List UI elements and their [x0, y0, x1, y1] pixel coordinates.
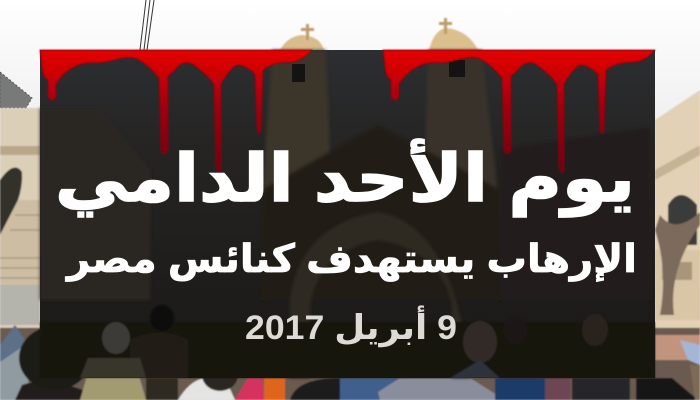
title: يوم الأحد الدامي	[55, 138, 635, 218]
power lines	[140, 0, 154, 50]
left building	[0, 108, 150, 330]
right building	[655, 90, 700, 330]
date: 9 أبريل 2017	[245, 305, 457, 348]
faint church arch	[290, 212, 470, 378]
left tower	[280, 24, 324, 50]
subtitle: الإرهاب يستهدف كنائس مصر	[65, 238, 637, 282]
right tower	[429, 18, 478, 50]
crowd	[0, 325, 700, 400]
dark overlay panel	[40, 50, 655, 378]
scaffold on left roof	[0, 72, 32, 108]
dim tower windows	[292, 60, 465, 82]
blood drip right	[383, 50, 655, 173]
dim crowd	[40, 305, 655, 378]
dim tower silhouettes	[262, 50, 332, 195]
blood drip left	[40, 50, 312, 173]
blood drips	[40, 50, 655, 173]
dim church facade	[262, 125, 500, 300]
